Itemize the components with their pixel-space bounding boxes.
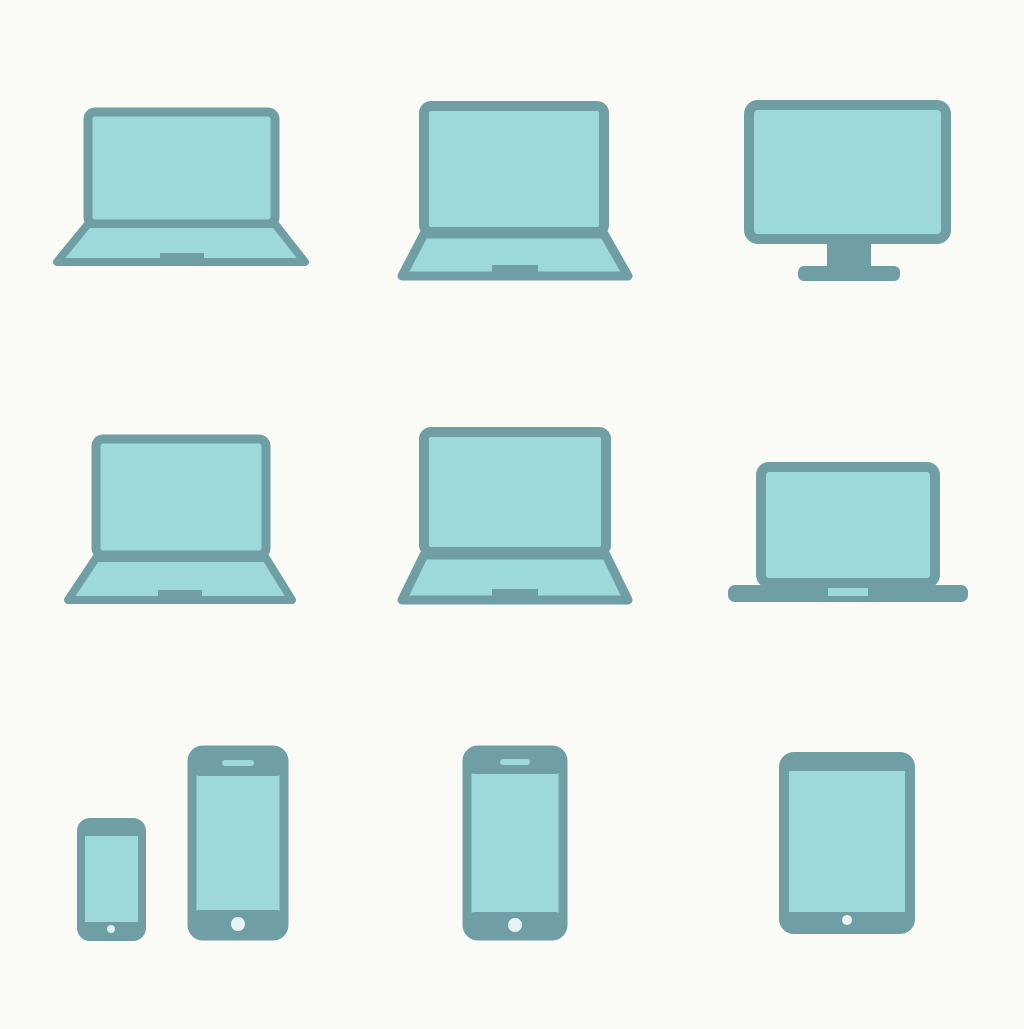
icon: phone 3 <box>467 750 563 936</box>
icon: laptop 1 <box>57 112 305 262</box>
icon: small phone <box>81 822 142 937</box>
icon: laptop 5 <box>402 432 628 600</box>
icon: tablet <box>784 757 910 929</box>
icon: large phone <box>192 750 284 936</box>
icon: laptop 2 <box>402 106 628 276</box>
icon: laptop 6 <box>728 467 968 602</box>
icon: laptop 4 <box>68 439 292 600</box>
icon: desktop monitor <box>749 105 946 281</box>
